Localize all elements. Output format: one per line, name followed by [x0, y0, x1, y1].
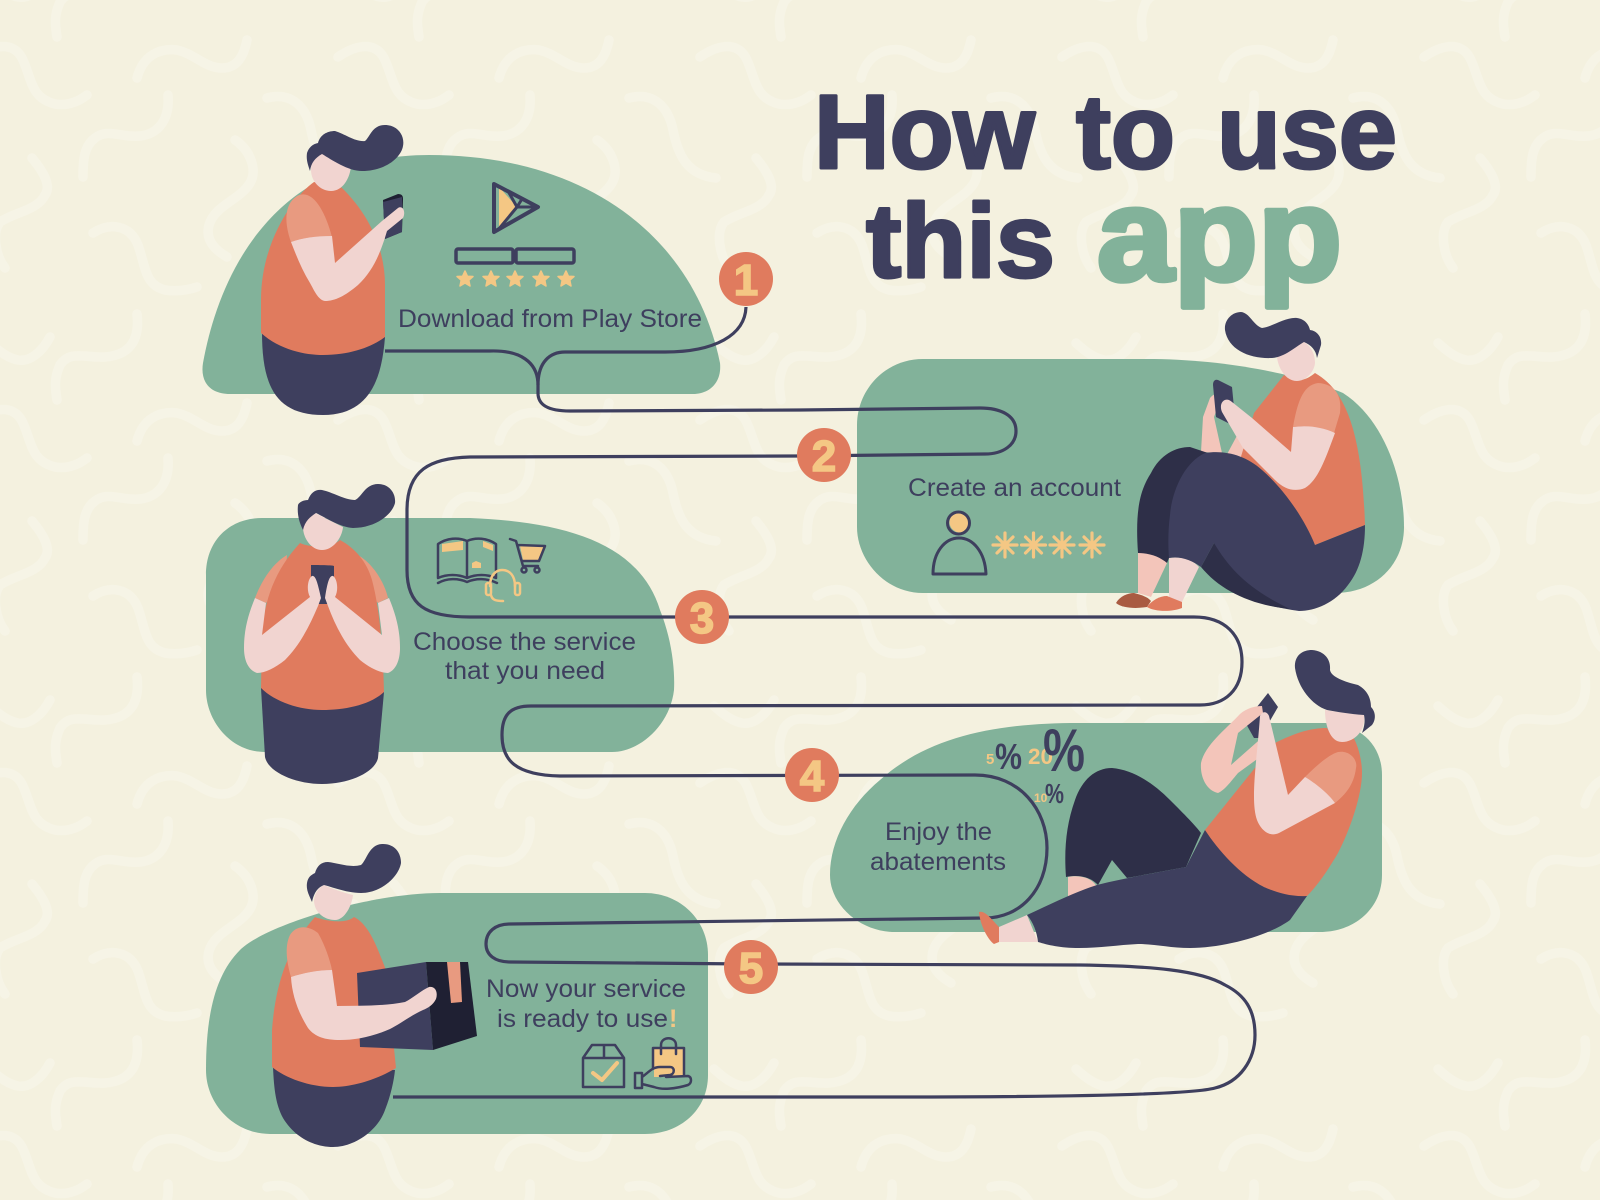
panel: step 1 background — [202, 155, 720, 394]
text: step 4: abatements — [870, 848, 1006, 876]
text: step 3 — [413, 628, 636, 685]
discount percent icons: 5 — [986, 751, 994, 768]
text: step 1: Download from Play Store — [398, 305, 702, 333]
icon: shopping cart — [510, 539, 545, 572]
title: app — [1097, 161, 1342, 308]
panel: step 5 background — [206, 893, 708, 1134]
figure: man with phone, step 1 — [261, 125, 404, 415]
discount percent icons: 10 — [1034, 791, 1048, 805]
text: step 2: Create an account — [908, 474, 1121, 502]
icon: shopping bag in hand — [635, 1038, 691, 1089]
badge: number 4: 4 — [800, 752, 825, 801]
title — [814, 74, 1397, 308]
text: step 5 — [486, 975, 686, 1033]
badge: number 1 — [719, 252, 773, 306]
discount percent icons: 20 — [1028, 744, 1053, 769]
icon: open book — [438, 539, 497, 583]
discount percent icons: % — [1043, 717, 1085, 784]
title: use — [1217, 74, 1397, 191]
discount percent icons — [986, 717, 1085, 809]
panel: step 3 background — [206, 518, 674, 752]
badge: number 1: 1 — [734, 256, 758, 305]
panel: step 4 background — [830, 723, 1382, 932]
icon: rating bars — [456, 249, 574, 263]
text: step 5: Now your service — [486, 975, 686, 1003]
icon: user profile — [933, 512, 986, 574]
discount percent icons: % — [995, 736, 1022, 777]
badge: number 3: 3 — [690, 594, 714, 643]
text: step 5: ! — [669, 1005, 677, 1033]
icon: five stars — [457, 271, 574, 286]
text: step 3: that you need — [445, 657, 605, 685]
figure: man with phone facing front, step 3 — [244, 484, 400, 784]
badge: number 5 — [724, 940, 778, 994]
badge: number 2: 2 — [812, 432, 836, 481]
text: step 5: is ready to use — [497, 1005, 668, 1033]
icon: checked box — [583, 1045, 624, 1087]
figure: seated man, step 2 — [1116, 312, 1365, 611]
figure: reclining man, step 4 — [979, 650, 1375, 948]
title: How — [814, 74, 1035, 191]
icon: password asterisks — [993, 533, 1104, 557]
badge: number 2 — [797, 428, 851, 482]
connector line through the steps — [385, 307, 1255, 1097]
badge: number 4 — [785, 748, 839, 802]
text: step 3: Choose the service — [413, 628, 636, 656]
icon: headset — [486, 570, 520, 601]
text: step 4 — [870, 818, 1006, 876]
badge: number 5: 5 — [739, 944, 763, 993]
title: this — [866, 183, 1055, 300]
icon: play store — [494, 184, 538, 232]
badge: number 3 — [675, 590, 729, 644]
title: to — [1076, 74, 1175, 191]
figure: man holding a box, step 5 — [272, 844, 477, 1147]
panel: step 2 background — [857, 359, 1404, 593]
text: step 4: Enjoy the — [885, 818, 992, 846]
discount percent icons: % — [1045, 778, 1064, 809]
